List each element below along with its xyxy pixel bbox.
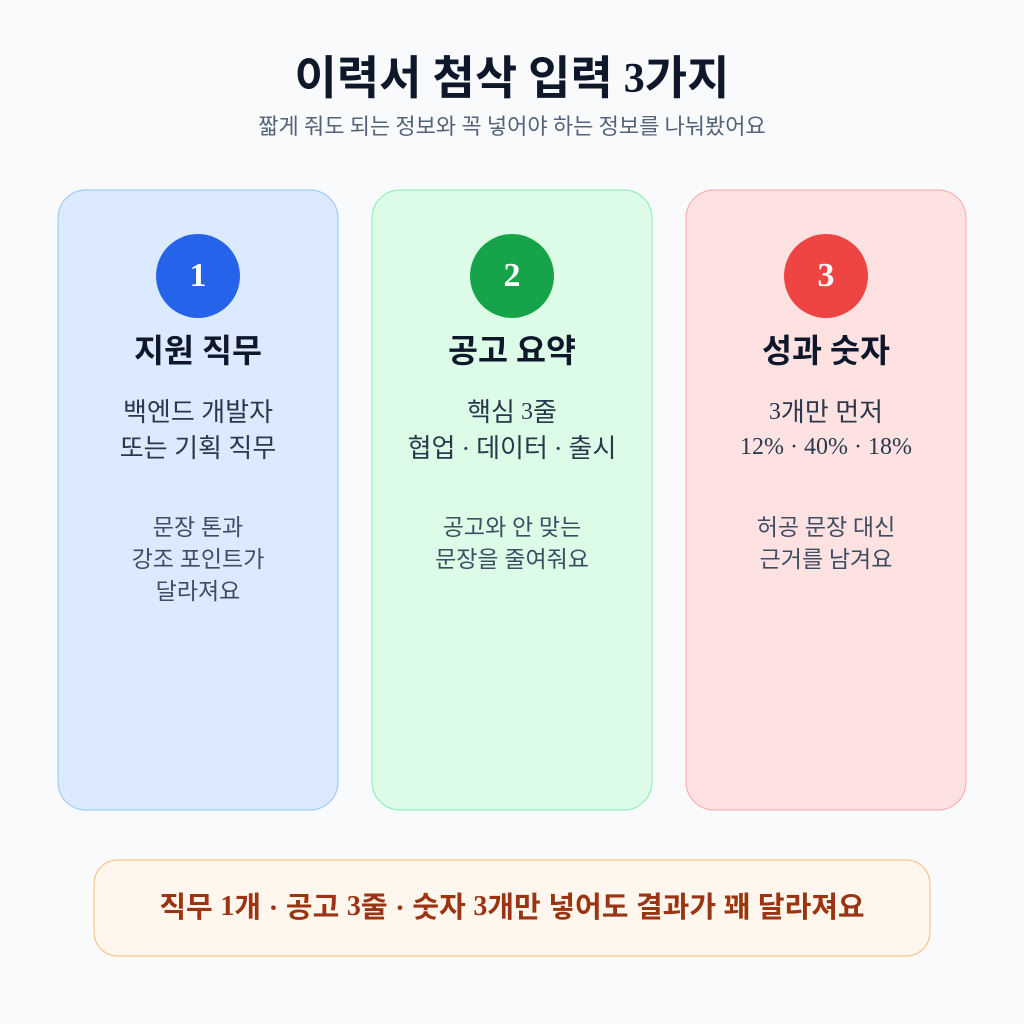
number badge 1: 1 xyxy=(190,257,206,294)
main text: 3 xyxy=(769,399,781,425)
callout: 3 xyxy=(473,891,487,922)
number badge 3 xyxy=(784,234,868,318)
card heading: 성과 숫자 xyxy=(762,333,890,370)
card heading: 지원 직무 xyxy=(134,333,262,370)
main text: 협업 · 데이터 · 출시 xyxy=(408,434,616,463)
card heading: 공고 요약 xyxy=(448,333,576,370)
number badge 1 xyxy=(156,234,240,318)
title: 3 xyxy=(624,56,645,102)
callout: 개 · 공고 xyxy=(234,891,347,924)
callout: 1 xyxy=(220,891,234,922)
main text: 3 xyxy=(521,399,533,425)
title: 이력서 첨삭 입력 xyxy=(295,53,613,104)
callout xyxy=(94,860,930,956)
note text: 근거를 남겨요 xyxy=(760,547,892,572)
callout: 개만 넣어도 결과가 꽤 달라져요 xyxy=(487,891,865,924)
main text: 백엔드 개발자 xyxy=(123,398,273,427)
note text: 문장을 줄여줘요 xyxy=(435,547,589,572)
card background xyxy=(686,190,966,810)
number badge 2 xyxy=(470,234,554,318)
number badge 2: 2 xyxy=(504,257,520,294)
callout: 줄 · 숫자 xyxy=(361,891,473,924)
note text: 공고와 안 맞는 xyxy=(443,515,581,540)
panel: 공고 요약 xyxy=(372,190,652,810)
note text: 문장 톤과 xyxy=(153,515,243,540)
main text: 줄 xyxy=(533,398,557,427)
main text: 12% · 40% · 18% xyxy=(740,434,912,460)
note text: 허공 문장 대신 xyxy=(757,515,895,540)
panel: 성과 숫자 xyxy=(686,190,966,810)
subtitle: 짧게 줘도 되는 정보와 꼭 넣어야 하는 정보를 나눠봤어요 xyxy=(258,114,766,139)
number badge 3: 3 xyxy=(818,257,834,294)
callout: 3 xyxy=(347,891,361,922)
panel: 지원 직무 xyxy=(58,190,338,810)
main text: 핵심 xyxy=(467,398,521,427)
callout: 직무 xyxy=(159,892,213,924)
card background xyxy=(372,190,652,810)
main text: 개만 먼저 xyxy=(781,398,883,427)
note text: 달라져요 xyxy=(156,579,240,604)
card background xyxy=(58,190,338,810)
title: 가지 xyxy=(645,53,729,104)
main text: 또는 기획 직무 xyxy=(120,434,276,463)
note text: 강조 포인트가 xyxy=(132,547,264,572)
